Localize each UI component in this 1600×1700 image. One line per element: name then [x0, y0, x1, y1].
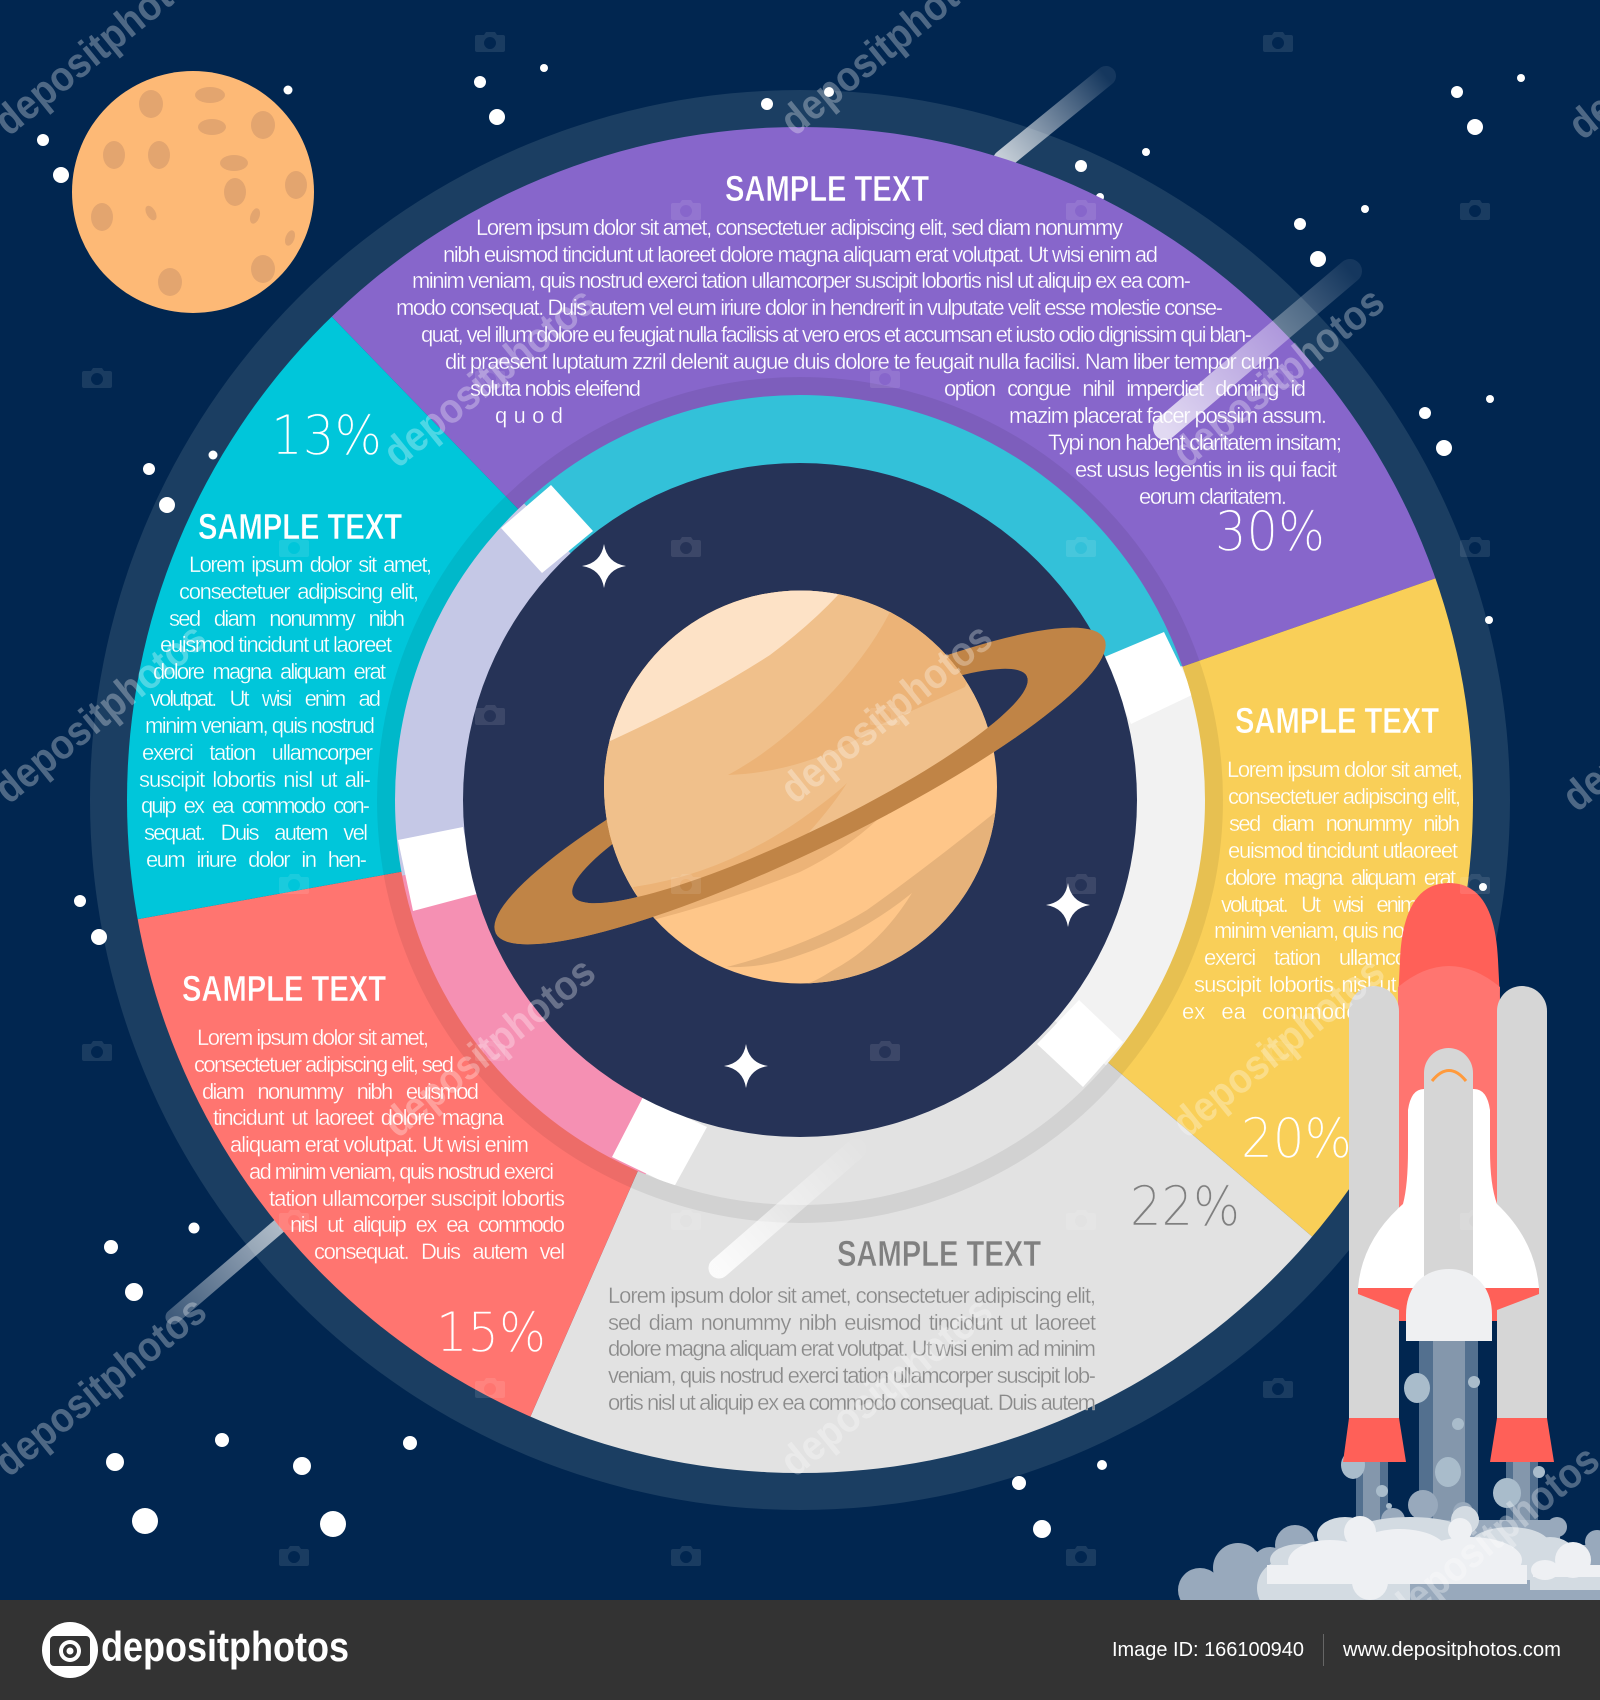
heading: SAMPLE TEXT — [182, 968, 386, 1009]
body text: volutpat. Ut wisi enim ad — [150, 686, 381, 711]
body text: Lorem ipsum dolor sit amet, consectetuer adipiscing elit, sed diam nonummy — [476, 215, 1123, 240]
body text: veniam, quis nostrud exerci tation ullamcorper suscipit lob- — [608, 1363, 1096, 1388]
segment: purple 30% — [332, 127, 1436, 666]
body text: sed diam nonummy nibh — [169, 606, 405, 631]
shuttle body — [1358, 1089, 1539, 1288]
rocket exhaust and smoke — [1178, 1341, 1600, 1616]
body text: consectetuer adipiscing elit, — [179, 579, 419, 604]
comet: upper right — [1165, 271, 1350, 428]
body text: quip ex ea commodo con- — [141, 793, 370, 818]
body text: exerci tation ullamcorper — [142, 740, 373, 765]
panel: teal text — [139, 404, 432, 872]
comet: bottom — [719, 1149, 856, 1268]
body text: aliquam erat volutpat. Ut wisi enim — [230, 1132, 529, 1157]
body text: tation ullamcorper suscipit lobortis — [269, 1186, 565, 1211]
body text: quat, vel illum dolore eu feugiat nulla facilisis at vero eros et accumsan et iusto odio dignissim qui blan- — [421, 322, 1252, 347]
percent: 30% — [1215, 500, 1325, 563]
footer logo icon — [42, 1622, 98, 1678]
comet: lower left — [173, 1214, 293, 1317]
watermarks: depositphotos — [374, 947, 604, 1146]
body text: sed diam nonummy nibh — [1229, 811, 1460, 836]
heading: SAMPLE TEXT — [837, 1233, 1041, 1274]
body text: ex ea commodo con — [1182, 999, 1410, 1024]
panel: gray text — [608, 1175, 1240, 1415]
inner ring shadow — [377, 377, 1223, 1223]
body text: consectetuer adipiscing elit, — [1228, 784, 1461, 809]
heading: SAMPLE TEXT — [725, 168, 929, 209]
image id: Image ID: 166100940 — [1112, 1639, 1304, 1661]
sparkle stars — [582, 544, 1090, 1088]
body text: dit praesent luptatum zzril delenit augue duis dolore te feugait nulla facilisi. Nam liber tempor cum — [445, 349, 1280, 374]
body text: exerci tation ullamcorper — [1204, 945, 1441, 970]
center tank — [1424, 1048, 1473, 1290]
watermark camera icons — [82, 32, 1490, 1566]
body text: consectetuer adipiscing elit, sed — [194, 1052, 454, 1077]
body text: eum iriure dolor in hen- — [146, 847, 367, 872]
body text: suscipit lobortis nisl ut ali- — [1194, 972, 1431, 997]
body text: ad minim veniam, quis nostrud exerci — [249, 1159, 554, 1184]
footer bar — [0, 1600, 1600, 1700]
heading: SAMPLE TEXT — [198, 506, 402, 547]
watermarks: depositphotos — [771, 1286, 1001, 1485]
moon with craters — [72, 71, 314, 313]
space shuttle rocket — [1343, 883, 1554, 1462]
body text: est usus legentis in iis qui facit — [1075, 457, 1337, 482]
body text: consequat. Duis autem vel — [314, 1239, 565, 1264]
body text: modo consequat. Duis autem vel eum iriure dolor in hendrerit in vulputate velit esse molestie conse- — [396, 295, 1223, 320]
body text: dolore magna aliquam erat — [153, 659, 386, 684]
right nozzle — [1490, 1418, 1554, 1462]
body text — [396, 215, 1342, 509]
right booster — [1497, 986, 1547, 1418]
body text: option congue nihil imperdiet doming id — [944, 376, 1306, 401]
body text: Lorem ipsum dolor sit amet, consectetuer adipiscing elit, — [608, 1283, 1096, 1308]
window arc — [1432, 1070, 1466, 1081]
body text: minim veniam, quis nostrud — [1214, 918, 1447, 943]
body text — [1182, 757, 1463, 1024]
website: www.depositphotos.com — [1342, 1639, 1561, 1661]
body text: euismod tincidunt ut laoreet — [160, 632, 392, 657]
watermarks: depositphotos — [771, 613, 1001, 812]
watermarks: depositphotos — [374, 277, 604, 476]
percent: 15% — [436, 1301, 546, 1364]
body text: suscipit lobortis nisl ut ali- — [139, 767, 371, 792]
body text: quod — [495, 403, 563, 428]
left nozzle — [1343, 1418, 1406, 1462]
body text: eorum claritatem. — [1139, 484, 1287, 509]
body text: minim veniam, quis nostrud exerci tation ullamcorper suscipit lobortis nisl ut aliquip ex ea com- — [412, 268, 1191, 293]
engine cover — [1406, 1269, 1492, 1341]
body text: volutpat. Ut wisi enim ad — [1221, 892, 1453, 917]
percent: 20% — [1241, 1107, 1352, 1170]
body text: dolore magna aliquam erat volutpat. Ut wisi enim ad minim — [608, 1336, 1096, 1361]
saturn planet with ring — [494, 590, 1106, 984]
segment: red 15% — [138, 872, 638, 1417]
panel: red text — [182, 968, 565, 1364]
body text — [608, 1283, 1096, 1415]
footer logo wordmark: depositphotos — [101, 1623, 349, 1670]
segment: gray 22% — [530, 1021, 1312, 1473]
body text — [139, 552, 432, 872]
body text: sequat. Duis autem vel — [144, 820, 368, 845]
percent: 22% — [1130, 1175, 1240, 1238]
watermarks: depositphotos — [1163, 947, 1393, 1146]
nose — [1398, 883, 1500, 1000]
body text: ortis nisl ut aliquip ex ea commodo consequat. Duis autem — [608, 1390, 1096, 1415]
body text: Lorem ipsum dolor sit amet, — [1227, 757, 1463, 782]
body text: nisl ut aliquip ex ea commodo — [290, 1212, 565, 1237]
panel: yellow text — [1182, 700, 1463, 1170]
center dark circle — [463, 463, 1137, 1137]
body text: Typi non habent claritatem insitam; — [1048, 430, 1342, 455]
body text: tincidunt ut laoreet dolore magna — [213, 1105, 505, 1130]
pie chart segments — [127, 127, 1473, 1473]
heading: SAMPLE TEXT — [1235, 700, 1439, 741]
body text: dolore magna aliquam erat — [1225, 865, 1456, 890]
watermarks: depositphotos — [1163, 277, 1393, 476]
body text: diam nonummy nibh euismod — [202, 1079, 479, 1104]
comet: top — [1003, 76, 1106, 160]
body text — [194, 1025, 565, 1264]
body text: sed diam nonummy nibh euismod tincidunt ut laoreet — [608, 1310, 1096, 1335]
percent: 13% — [271, 404, 382, 467]
footer divider — [1323, 1634, 1324, 1666]
body text: Lorem ipsum dolor sit amet, — [197, 1025, 429, 1050]
body text: soluta nobis eleifend — [470, 376, 641, 401]
inner colored ring — [395, 395, 1205, 1205]
body text: mazim placerat facer possim assum. — [1009, 403, 1327, 428]
body text: euismod tincidunt utlaoreet — [1228, 838, 1458, 863]
panel: purple text — [396, 168, 1342, 563]
body text: Lorem ipsum dolor sit amet, — [189, 552, 432, 577]
body text: nibh euismod tincidunt ut laoreet dolore magna aliquam erat volutpat. Ut wisi enim ad — [443, 242, 1158, 267]
body text: minim veniam, quis nostrud — [145, 713, 375, 738]
segment: teal 13% — [127, 316, 518, 920]
segment: yellow 20% — [1108, 578, 1473, 1236]
main tank — [1398, 966, 1500, 1321]
wing underside — [1358, 1288, 1539, 1321]
left booster — [1349, 986, 1399, 1418]
outer orbit band — [90, 90, 1510, 1510]
